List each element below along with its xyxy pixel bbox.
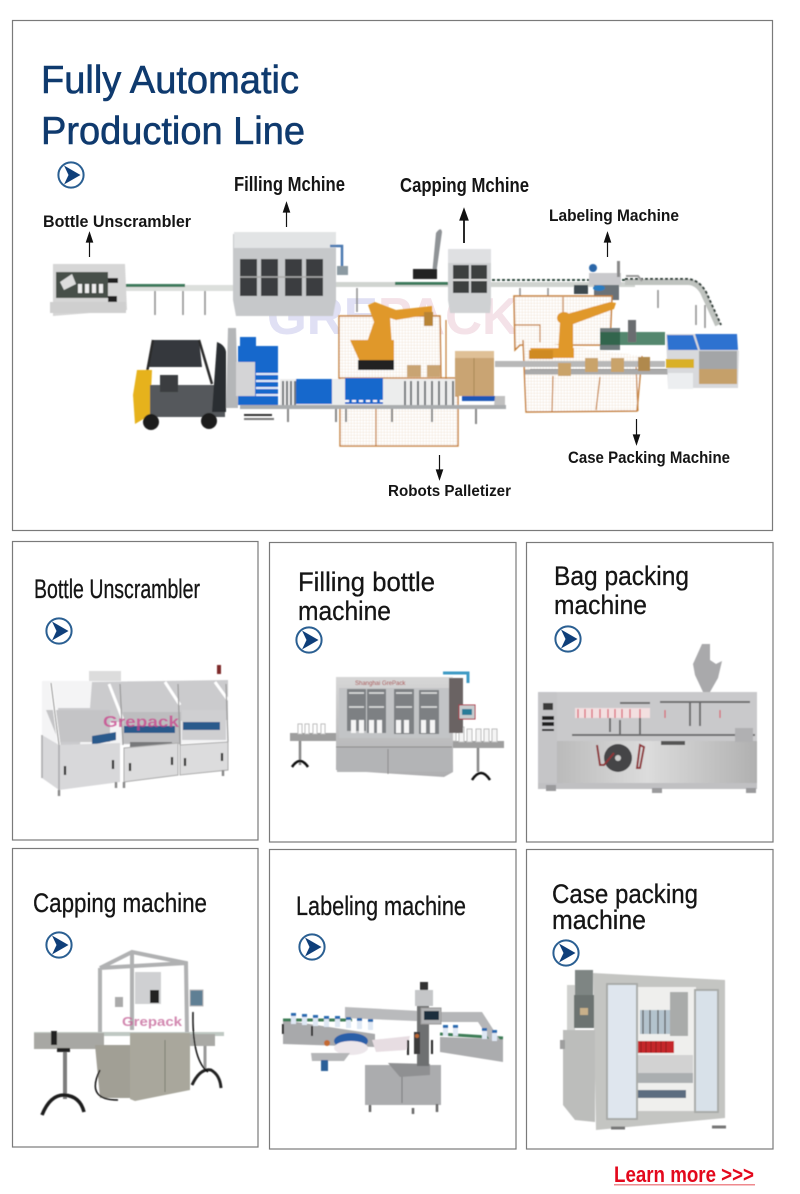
machine image: labeling machine [283,982,503,1114]
case line with boxes [495,320,672,376]
robot arm: case side [529,302,616,359]
panel: labeling machine [270,850,516,1149]
card title: Bottle Unscrambler [34,574,200,604]
machine image: case packing machine [560,970,726,1130]
label: filling machine: Filling Mchine [234,174,345,196]
machine image: bottle unscrambler: Grepack [103,714,179,731]
robot arm: palletizer [350,302,433,370]
card title [298,567,435,626]
case packing machine [666,334,739,389]
arrows: callout pointers [86,203,640,479]
card title: Capping machine [33,888,207,918]
panel: bottle unscrambler [12,542,258,840]
labeling machine [574,261,642,300]
machine image: filling machine: Shanghai GrePack [355,681,406,687]
icon: chevron arrow [555,626,581,652]
stacked cartons [407,351,505,407]
robot cell: pallet side [339,316,458,446]
card title [554,561,689,620]
panel: fully automatic production line [12,20,772,530]
card title [552,879,698,935]
title: Production Line [41,110,305,153]
icon: chevron arrow [58,162,84,188]
panel: filling bottle machine [270,542,516,842]
panel: capping machine [12,848,258,1147]
panel: case packing machine [526,850,773,1149]
icon: chevron arrow [46,618,72,644]
capping machine [413,229,491,313]
panel: bag packing machine [526,542,773,842]
upper conveyor [125,279,721,328]
card title: Filling bottle [298,567,435,597]
pallet stacker [226,328,278,408]
link: learn more: Learn more >>> [614,1162,754,1187]
machine image: bottle unscrambler [42,665,228,796]
bottle unscrambler [50,264,127,316]
illustration: production line layout [50,229,739,446]
card title: machine [298,596,391,626]
watermark: GREPACK: GREPACK [267,288,519,346]
forklift [133,340,274,430]
roller conveyor with pallets [240,378,506,424]
icon: chevron arrow [296,627,322,653]
label: robots palletizer: Robots Palletizer [388,483,511,500]
label: case packing machine: Case Packing Machine [568,449,730,467]
robot cell: case side [514,296,642,412]
card title: Labeling machine [296,891,466,921]
icon: chevron arrow [553,940,579,966]
label: bottle unscrambler: Bottle Unscrambler [43,212,191,231]
machine image: filling machine [290,673,504,780]
icon: chevron arrow [299,934,325,960]
machine image: capping machine [34,952,224,1115]
card title: Bag packing [554,561,689,591]
title: Fully Automatic [41,59,299,102]
label: capping machine: Capping Mchine [400,175,529,197]
machine image: capping machine: Grepack [122,1014,183,1029]
icon: chevron arrow [46,932,72,958]
filling machine [233,232,348,316]
label: labeling machine: Labeling Machine [549,207,679,225]
machine image: bag packing machine [538,644,757,793]
card title: machine [552,905,646,935]
card title: Case packing [552,879,698,909]
title [41,59,305,153]
card title: machine [554,590,647,620]
